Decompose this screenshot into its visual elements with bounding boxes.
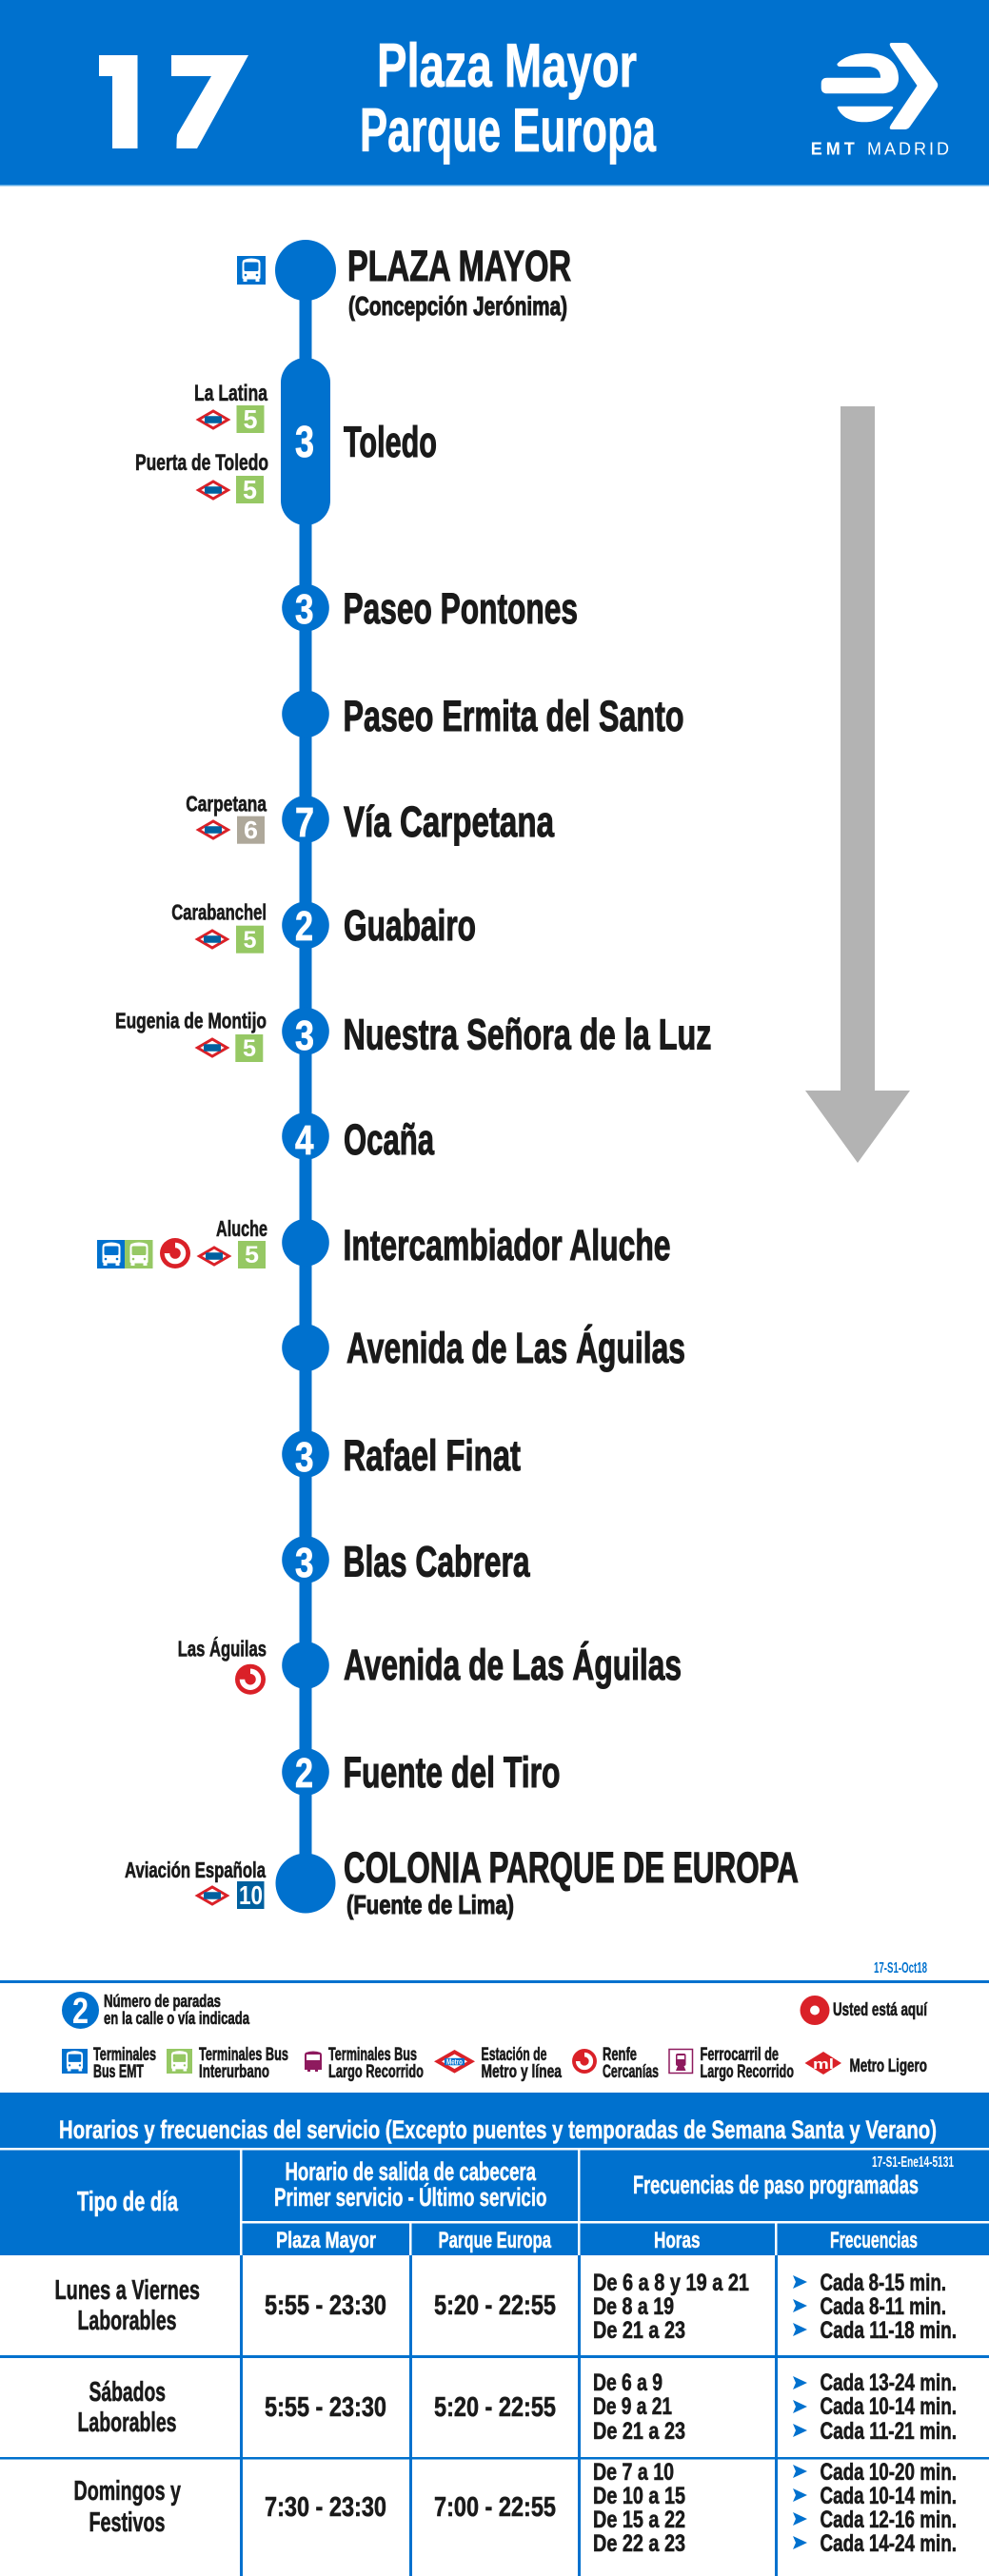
row: Domingos y Festivos bbox=[74, 2459, 957, 2557]
stop: Avenida de Las Águilas (2): Avenida de Las Águilas bbox=[344, 1641, 682, 1689]
row: Sábados: Sábados bbox=[89, 2377, 166, 2408]
column head: frequencies bbox=[633, 2154, 954, 2199]
connection: Eugenia de Montijo bbox=[115, 1009, 267, 1062]
header band bbox=[0, 0, 989, 185]
legend: interurban bus terminals: Interurbano bbox=[199, 2062, 269, 2082]
stop: Blas Cabrera bbox=[282, 1536, 530, 1586]
stop: Intercambiador Aluche: Intercambiador Aluche bbox=[343, 1221, 670, 1269]
connection: Aviación Española: 10 bbox=[239, 1880, 263, 1910]
sub heads: Plaza Mayor bbox=[276, 2228, 376, 2253]
legend: long distance rail bbox=[669, 2045, 794, 2082]
connection: Carabanchel bbox=[171, 900, 267, 954]
route line bbox=[299, 270, 312, 1883]
legend: long distance rail: Largo Recorrido bbox=[701, 2062, 794, 2082]
stop: Guabairo: Guabairo bbox=[344, 901, 476, 950]
stop: Rafael Finat bbox=[282, 1430, 521, 1481]
EMT Madrid logo: MADRID bbox=[867, 140, 949, 159]
timetable grid bbox=[0, 2255, 989, 2576]
legend: interurban bus terminals bbox=[167, 2045, 288, 2082]
legend: long distance rail: Ferrocarril de bbox=[701, 2045, 779, 2065]
row: Domingos y Festivos: 7:00 - 22:55 bbox=[434, 2492, 556, 2523]
connection: Aluche: 5 bbox=[245, 1242, 259, 1268]
legend: Renfe bbox=[572, 2045, 659, 2082]
column head: day type: Tipo de día bbox=[77, 2187, 179, 2217]
hours: De 10 a 15 bbox=[593, 2483, 685, 2509]
legend: number of stops: 2 bbox=[72, 1992, 89, 2032]
stop: Ocaña: Ocaña bbox=[344, 1115, 435, 1164]
connection: Aviación Española: Aviación Española bbox=[125, 1858, 266, 1882]
legend: you are here: Usted está aquí bbox=[833, 2000, 928, 2020]
sub heads: Parque Europa bbox=[438, 2228, 551, 2253]
stop: Toledo: Toledo bbox=[344, 418, 437, 466]
stop: Vía Carpetana: 7 bbox=[295, 799, 314, 846]
legend: Renfe: Renfe bbox=[603, 2045, 637, 2065]
stop: Paseo Pontones bbox=[282, 584, 578, 633]
legend: metro station: Estación de bbox=[482, 2045, 546, 2065]
legend: light rail: ml bbox=[813, 2056, 834, 2073]
route number: 1 bbox=[95, 25, 141, 171]
connection: Puerta de Toledo: Puerta de Toledo bbox=[135, 450, 268, 476]
connection: Las Águilas bbox=[178, 1636, 267, 1695]
connection: La Latina bbox=[194, 381, 267, 434]
connection: Puerta de Toledo bbox=[135, 450, 268, 504]
connection: La Latina: La Latina bbox=[194, 381, 267, 406]
connection: Carpetana: 6 bbox=[244, 816, 258, 844]
hours: De 22 a 23 bbox=[593, 2530, 685, 2557]
hours: De 21 a 23 bbox=[593, 2418, 685, 2445]
row: Lunes a Viernes: Lunes a Viernes bbox=[55, 2275, 200, 2306]
row: Lunes a Viernes bbox=[55, 2270, 957, 2344]
legend: metro station bbox=[438, 2045, 562, 2082]
hours: De 7 a 10 bbox=[593, 2459, 674, 2486]
stop: Avenida de Las Águilas: Avenida de Las Águilas bbox=[346, 1324, 685, 1372]
icon: EMT bus terminal bbox=[237, 256, 266, 285]
legend: light rail bbox=[805, 2052, 927, 2076]
legend: EMT bus terminals: Terminales bbox=[93, 2045, 156, 2065]
legend: number of stops: en la calle o vía indicada bbox=[104, 2009, 250, 2028]
hours bbox=[593, 2370, 685, 2445]
stop: Paseo Pontones: Paseo Pontones bbox=[343, 584, 578, 633]
connection: Carabanchel: 5 bbox=[244, 927, 257, 954]
stop name bbox=[344, 1843, 799, 1919]
column head: departure times bbox=[274, 2157, 546, 2212]
connection: La Latina: 5 bbox=[244, 404, 257, 434]
route number: 7 bbox=[169, 27, 250, 173]
route terminals title: Plaza Mayor bbox=[377, 30, 637, 100]
stop: Toledo: 3 bbox=[295, 417, 314, 466]
stop: Ocaña: 4 bbox=[295, 1117, 314, 1164]
version code: 17-S1-Oct18 bbox=[874, 1960, 927, 1976]
connection: Aluche: Aluche bbox=[216, 1216, 267, 1241]
legend: long distance terminals bbox=[305, 2045, 424, 2082]
hours: De 6 a 9 bbox=[593, 2370, 663, 2396]
stop: Avenida de Las Águilas bbox=[282, 1324, 685, 1372]
stop: Plaza Mayor bbox=[237, 240, 571, 321]
legend: Renfe: Cercanías bbox=[603, 2062, 659, 2082]
hours bbox=[593, 2270, 749, 2344]
connection: Aviación Española bbox=[125, 1858, 266, 1910]
stop: Fuente del Tiro: 2 bbox=[295, 1750, 313, 1797]
stop: Guabairo: 2 bbox=[295, 903, 313, 950]
row: Lunes a Viernes: 5:55 - 23:30 bbox=[265, 2291, 386, 2321]
row: Domingos y Festivos: Festivos bbox=[89, 2507, 166, 2538]
EMT Madrid logo: EMT bbox=[811, 140, 855, 159]
stop: Blas Cabrera: 3 bbox=[295, 1540, 314, 1586]
row: Sábados: Laborables bbox=[78, 2408, 177, 2438]
stop: Fuente del Tiro: Fuente del Tiro bbox=[343, 1748, 560, 1797]
hours: De 8 a 19 bbox=[593, 2293, 674, 2320]
legend: long distance terminals: Terminales Bus bbox=[328, 2045, 417, 2065]
stop name: (Fuente de Lima) bbox=[346, 1890, 514, 1919]
stop: Paseo Ermita del Santo: Paseo Ermita del Santo bbox=[343, 692, 683, 740]
row: Lunes a Viernes: Laborables bbox=[78, 2306, 177, 2336]
frequencies bbox=[793, 2370, 957, 2445]
sub heads: Horas bbox=[654, 2228, 701, 2253]
frequencies bbox=[793, 2459, 957, 2557]
stop: Ocaña bbox=[282, 1112, 435, 1164]
legend bbox=[62, 1992, 928, 2082]
icon: Renfe bbox=[160, 1238, 190, 1268]
frequencies: Cada 8-15 min. bbox=[821, 2270, 946, 2296]
connection: Eugenia de Montijo: 5 bbox=[243, 1035, 256, 1062]
stop: Vía Carpetana: Vía Carpetana bbox=[344, 797, 555, 846]
legend: long distance terminals: Largo Recorrido bbox=[328, 2062, 424, 2082]
row: Domingos y Festivos: Domingos y bbox=[74, 2476, 181, 2507]
direction arrow bbox=[805, 406, 910, 1163]
icon: interurban bus terminal bbox=[125, 1240, 152, 1268]
stop: Rafael Finat: 3 bbox=[295, 1434, 314, 1481]
stop: Vía Carpetana bbox=[186, 792, 555, 846]
stop: Fuente del Tiro bbox=[282, 1748, 560, 1797]
row: Sábados: 5:20 - 22:55 bbox=[434, 2392, 556, 2423]
legend: EMT bus terminals bbox=[62, 2045, 156, 2082]
route number bbox=[99, 55, 248, 148]
stop: Guabairo bbox=[171, 900, 476, 954]
stop name bbox=[347, 242, 571, 321]
stop: Nuestra Señora de la Luz: Nuestra Señora de la Luz bbox=[343, 1011, 712, 1058]
legend: light rail: Metro Ligero bbox=[849, 2056, 927, 2076]
stop: Nuestra Señora de la Luz: 3 bbox=[295, 1013, 314, 1059]
stop: Paseo Ermita del Santo bbox=[282, 691, 683, 740]
stop: Paseo Pontones: 3 bbox=[295, 586, 314, 633]
route terminals title: Parque Europa bbox=[360, 95, 657, 165]
legend: metro station: Metro y línea bbox=[482, 2062, 562, 2082]
legend: number of stops: Número de paradas bbox=[104, 1992, 221, 2011]
stop: Intercambiador Aluche bbox=[97, 1216, 670, 1269]
EMT Madrid logo bbox=[811, 43, 949, 159]
route terminals title bbox=[360, 30, 657, 165]
stop name: PLAZA MAYOR bbox=[347, 242, 571, 290]
frequencies: Cada 8-11 min. bbox=[821, 2293, 946, 2320]
stop: Blas Cabrera: Blas Cabrera bbox=[343, 1538, 530, 1586]
hours bbox=[593, 2459, 685, 2557]
connection: Puerta de Toledo: 5 bbox=[243, 475, 257, 504]
hours: De 15 a 22 bbox=[593, 2507, 685, 2533]
sub heads bbox=[276, 2228, 918, 2253]
row: Sábados bbox=[78, 2370, 957, 2445]
row: Lunes a Viernes: 5:20 - 22:55 bbox=[434, 2291, 556, 2321]
sub heads: Frecuencias bbox=[830, 2228, 918, 2253]
frequencies bbox=[793, 2270, 957, 2344]
stop name: (Concepción Jerónima) bbox=[348, 291, 567, 321]
legend: number of stops bbox=[62, 1992, 250, 2032]
legend: interurban bus terminals: Terminales Bus bbox=[199, 2045, 288, 2065]
stop: Nuestra Señora de la Luz bbox=[115, 1008, 712, 1062]
icon: EMT bus terminal bbox=[97, 1240, 126, 1268]
stop name: COLONIA PARQUE DE EUROPA bbox=[344, 1843, 799, 1892]
stop: Avenida de Las Águilas (2) bbox=[178, 1636, 682, 1695]
hours: De 6 a 8 y 19 a 21 bbox=[593, 2270, 749, 2296]
row: Domingos y Festivos: 7:30 - 23:30 bbox=[265, 2492, 386, 2523]
connection: Carpetana bbox=[186, 792, 267, 844]
connection: Aluche bbox=[97, 1216, 267, 1268]
column head: departure times: Primer servicio - Último servicio bbox=[274, 2182, 546, 2212]
connection: Carpetana: Carpetana bbox=[186, 792, 267, 816]
hours: De 9 a 21 bbox=[593, 2393, 672, 2420]
stop: Toledo bbox=[135, 358, 437, 525]
connection: Carabanchel: Carabanchel bbox=[171, 900, 267, 925]
stop: Rafael Finat: Rafael Finat bbox=[343, 1431, 521, 1480]
hours: De 21 a 23 bbox=[593, 2317, 685, 2344]
timetable header bbox=[0, 2093, 989, 2255]
column head: departure times: Horario de salida de cabecera bbox=[286, 2157, 537, 2186]
stop: Colonia Parque de Europa bbox=[125, 1843, 799, 1919]
connection: Las Águilas: Las Águilas bbox=[178, 1636, 267, 1662]
connection: Eugenia de Montijo: Eugenia de Montijo bbox=[115, 1009, 267, 1033]
row: Sábados: 5:55 - 23:30 bbox=[265, 2392, 386, 2423]
legend: EMT bus terminals: Bus EMT bbox=[93, 2062, 144, 2082]
legend: you are here bbox=[800, 1996, 928, 2025]
legend: metro station: Metro bbox=[446, 2057, 463, 2067]
